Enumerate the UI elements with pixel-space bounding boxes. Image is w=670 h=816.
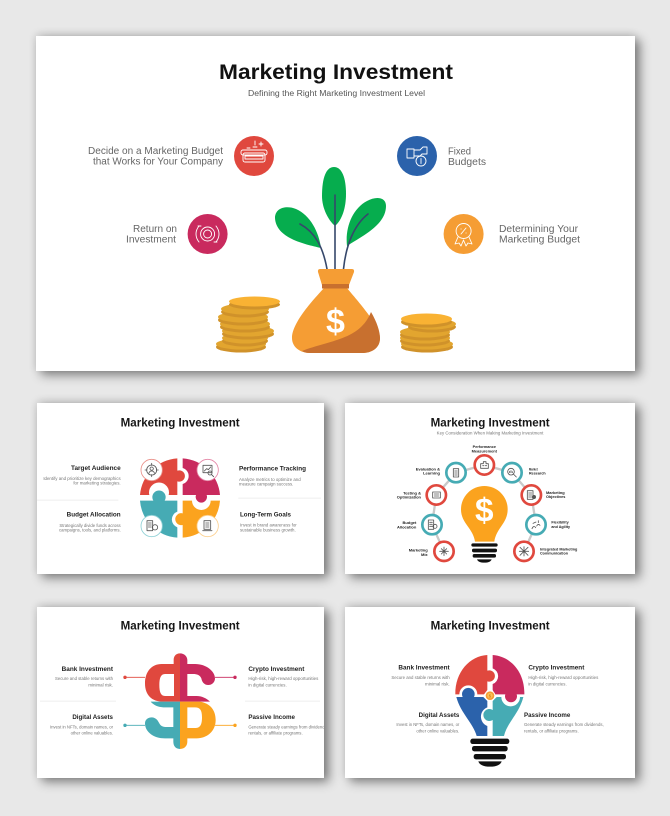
text: passive income: Generate steady earnings from dividends, xyxy=(524,722,604,727)
text: crypto investment: Crypto Investment xyxy=(528,665,585,672)
text: digital assets xyxy=(396,712,460,734)
illustration: plant leaves xyxy=(275,167,386,269)
text: digital assets xyxy=(50,714,114,736)
icon: red budget machine xyxy=(234,136,274,176)
text: bank investment: Bank Investment xyxy=(398,665,450,672)
labels: consideration names: Communication xyxy=(540,551,569,556)
text: crypto investment: High-risk, high-reward opportunities xyxy=(248,676,318,681)
labels: consideration names: Allocation xyxy=(397,524,417,529)
text: digital assets: Digital Assets xyxy=(72,714,113,721)
bulb: red piece xyxy=(455,655,495,694)
panel: puzzle circle slide xyxy=(37,403,324,574)
dollar sign: orange piece xyxy=(180,702,216,749)
panel: light bulb ring slide xyxy=(345,403,635,574)
text: performance tracking: Analyze metrics to optimize and xyxy=(239,477,301,482)
coin xyxy=(485,690,495,701)
text: long-term goals: sustainable business growth. xyxy=(240,527,296,532)
text: passive income xyxy=(524,712,604,734)
text: crypto investment: High-risk, high-reward opportunities xyxy=(528,675,598,680)
text: crypto investment xyxy=(528,665,598,687)
bulb: teal piece xyxy=(483,697,523,736)
node: market research xyxy=(502,463,522,482)
labels: consideration names: Integrated Marketing xyxy=(540,546,578,551)
node: testing and optimization xyxy=(427,485,446,505)
dollar sign: teal piece xyxy=(145,702,180,749)
text: target audience: for marketing strategies. xyxy=(73,481,121,486)
connector: crimson xyxy=(215,676,237,679)
labels: consideration names: Mix xyxy=(421,552,428,557)
panel: main slide xyxy=(36,36,635,371)
node: marketing objectives xyxy=(522,485,541,505)
labels: consideration names: Marketing xyxy=(409,548,428,553)
icon: target audience xyxy=(141,459,162,481)
subtitle: Defining the Right Marketing Investment Level xyxy=(248,89,425,98)
text: bank investment: Secure and stable returns with xyxy=(55,676,114,681)
coin: $ xyxy=(489,693,492,698)
text: performance tracking: Performance Tracking xyxy=(239,466,306,473)
text: digital assets: Invest in NFTs, domain names, or xyxy=(50,724,114,729)
label: decide on a marketing budget xyxy=(88,146,223,168)
puzzle: crimson piece xyxy=(183,458,220,503)
connector: teal xyxy=(123,724,145,727)
node: integrated marketing communication xyxy=(514,542,534,561)
connector: red xyxy=(123,676,145,679)
labels: consideration names: Marketing xyxy=(546,490,565,495)
node: evaluation and learning xyxy=(446,463,466,482)
text: budget allocation: Strategically divide funds across xyxy=(59,523,121,528)
node: flexibility and agility xyxy=(526,515,546,534)
text: passive income: rentals, or affiliate programs. xyxy=(248,731,303,736)
text: crypto investment: in digital currencies. xyxy=(248,683,287,688)
icon: crimson return on investment xyxy=(188,214,228,254)
bulb: crimson piece xyxy=(493,655,524,702)
labels: consideration names: Market xyxy=(529,466,538,471)
illustration: money bag xyxy=(292,269,380,353)
text: long-term goals: Invest in brand awareness for xyxy=(240,523,297,528)
text: target audience xyxy=(43,465,121,486)
node: marketing mix xyxy=(434,542,454,561)
labels: consideration names: Objectives xyxy=(546,494,566,499)
text: digital assets: other online valuables. xyxy=(71,731,113,736)
labels: consideration names: Testing & xyxy=(403,490,421,495)
text: performance tracking: measure campaign success. xyxy=(239,482,293,487)
text: digital assets: Digital Assets xyxy=(419,712,460,719)
illustration: right coin stack xyxy=(400,314,456,352)
label: return on investment: Investment xyxy=(126,234,176,246)
label: fixed budgets: Budgets xyxy=(448,157,486,168)
labels: consideration names: Budget xyxy=(403,520,417,525)
labels: consideration names: Research xyxy=(529,470,546,475)
labels: consideration names: Optimization xyxy=(397,495,422,500)
connector: orange xyxy=(215,724,237,727)
text: budget allocation xyxy=(59,511,121,533)
icon: blue fixed budgets xyxy=(397,136,437,176)
connector ring xyxy=(432,465,536,551)
label: determining your marketing budget xyxy=(499,224,580,246)
dollar sign: crimson piece xyxy=(180,653,215,702)
icon: performance chart xyxy=(197,459,218,481)
text: long-term goals: Long-Term Goals xyxy=(240,511,291,518)
text: long-term goals xyxy=(240,511,297,532)
icon: budget document xyxy=(141,515,162,537)
text: bank investment: Bank Investment xyxy=(62,666,114,673)
panel: dollar puzzle slide xyxy=(37,607,324,778)
illustration: money bag: $ xyxy=(326,303,345,341)
puzzle: orange piece xyxy=(175,501,220,538)
labels: consideration names: Learning xyxy=(423,471,441,476)
puzzle: teal piece xyxy=(140,490,177,538)
text: budget allocation: Budget Allocation xyxy=(67,511,121,518)
label: return on investment xyxy=(126,224,177,246)
light bulb with dollar sign xyxy=(461,486,508,563)
text: bank investment: Secure and stable returns with xyxy=(391,675,450,680)
label: determining your marketing budget: Marketing Budget xyxy=(499,234,580,246)
icon: orange badge xyxy=(444,214,484,254)
heading: Marketing Investment xyxy=(431,619,550,632)
text: bank investment xyxy=(55,666,114,688)
text: digital assets: Invest in NFTs, domain names, or xyxy=(396,722,460,727)
icon: long-term goals xyxy=(197,515,218,537)
text: target audience: Identify and prioritize key demographics xyxy=(43,476,121,481)
heading: Marketing Investment xyxy=(121,416,240,429)
label: fixed budgets xyxy=(448,146,486,168)
text: bank investment: minimal risk. xyxy=(425,682,450,687)
text: target audience: Target Audience xyxy=(71,465,121,472)
heading: Marketing Investment xyxy=(431,416,550,429)
title: Marketing Investment xyxy=(219,61,453,84)
bulb: blue piece xyxy=(456,688,487,736)
label: determining your marketing budget: Determining Your xyxy=(499,224,579,235)
dollar sign: red piece xyxy=(145,653,180,702)
illustration: left coin stack xyxy=(216,296,280,352)
text: performance tracking xyxy=(239,466,306,487)
label: return on investment: Return on xyxy=(133,224,177,235)
text: passive income: Passive Income xyxy=(524,712,571,719)
labels: consideration names: Evaluation & xyxy=(416,466,440,471)
text: bank investment xyxy=(391,665,450,687)
text: budget allocation: campaigns, tools, and platforms. xyxy=(59,528,121,533)
label: decide on a marketing budget: Decide on a Marketing Budget xyxy=(88,146,223,157)
node: performance measurement xyxy=(475,455,494,475)
bulb base xyxy=(470,739,509,767)
text: crypto investment: in digital currencies. xyxy=(528,682,567,687)
light bulb with dollar sign: $ xyxy=(475,492,494,529)
node: budget allocation xyxy=(422,515,442,534)
labels: consideration names: Measurement xyxy=(472,448,498,453)
panel: puzzle bulb slide xyxy=(345,607,635,778)
puzzle: red piece xyxy=(140,458,185,495)
labels: consideration names: Performance xyxy=(473,444,497,449)
labels: consideration names: and Agility xyxy=(551,524,571,529)
labels: consideration names xyxy=(397,444,578,557)
text: crypto investment xyxy=(248,666,318,688)
text: passive income: rentals, or affiliate programs. xyxy=(524,729,579,734)
text: bank investment: minimal risk. xyxy=(88,683,113,688)
text: crypto investment: Crypto Investment xyxy=(248,666,305,673)
text: digital assets: other online valuables. xyxy=(416,729,459,734)
heading: Marketing Investment xyxy=(121,619,240,632)
label: decide on a marketing budget: that Works for Your Company xyxy=(93,156,223,168)
text: passive income: Passive Income xyxy=(248,714,295,721)
text: passive income xyxy=(248,714,328,736)
subtitle: Key Consideration When Making Marketing Investment xyxy=(437,431,544,436)
labels: consideration names: Flexibility xyxy=(551,520,569,525)
label: fixed budgets: Fixed xyxy=(448,146,471,158)
